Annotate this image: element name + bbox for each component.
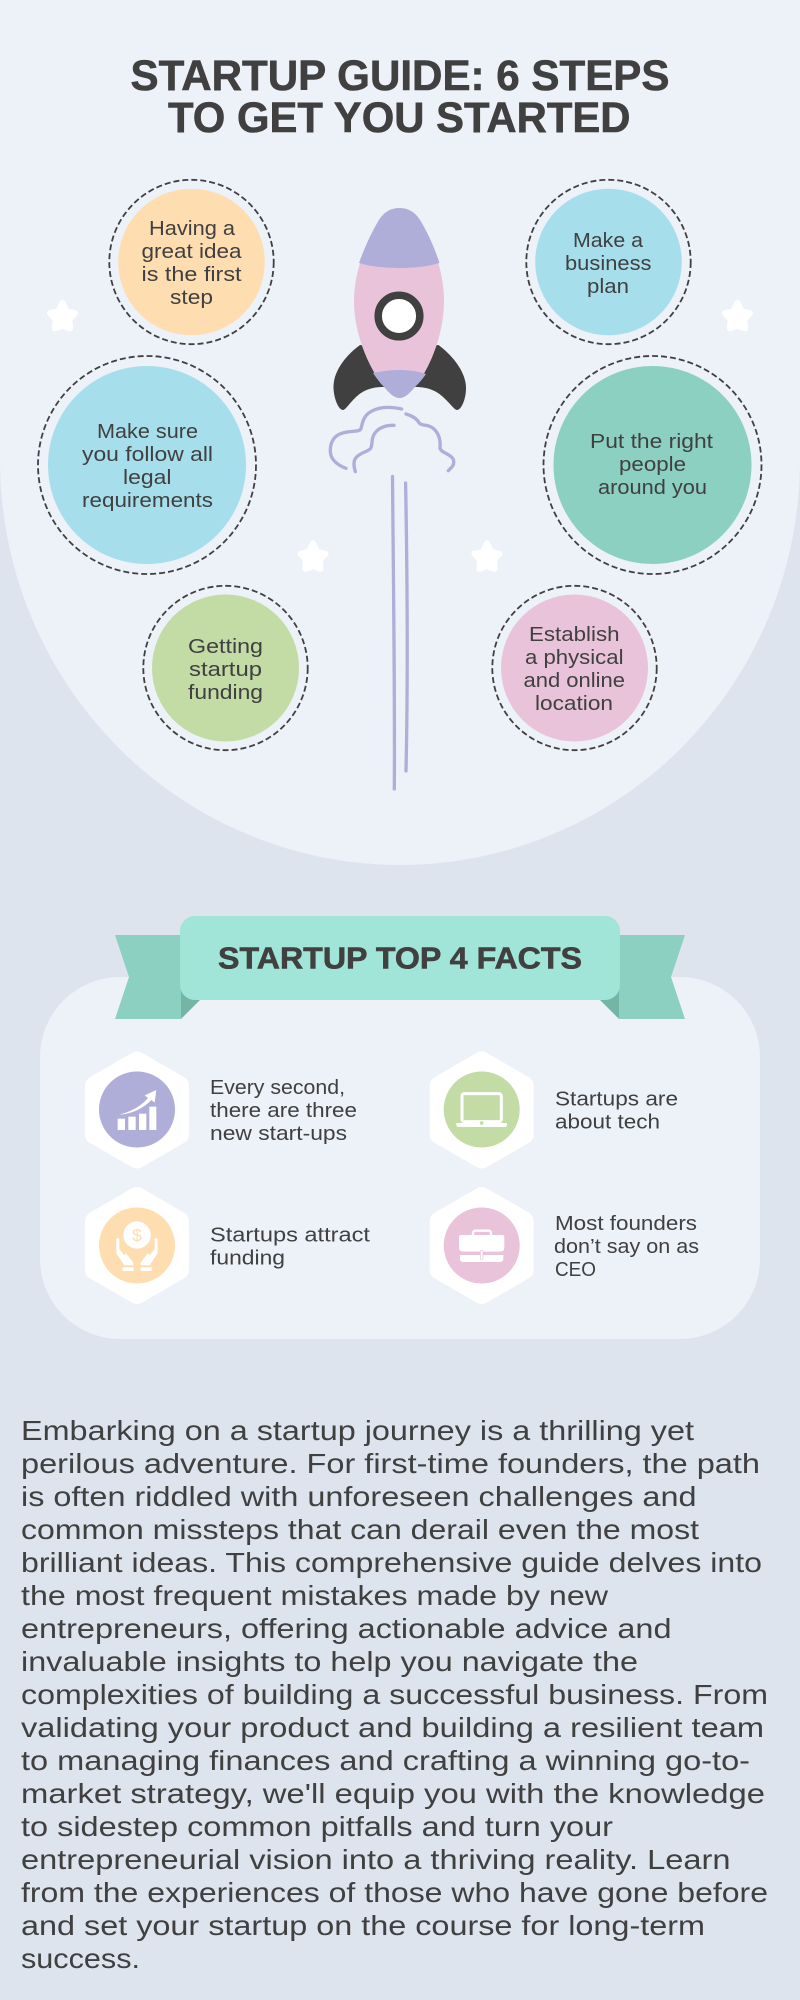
step: follow legal requirements: requirements [82, 489, 213, 512]
step: having a great idea: is the first [142, 263, 242, 286]
text block: intro paragraph: and set your startup on the course for long-term [21, 1910, 705, 1941]
fact: most founders don't stay on as CEO: don’t say on as [554, 1235, 699, 1258]
text block: intro paragraph: is often riddled with unforeseen challenges and [21, 1481, 696, 1512]
text block: intro paragraph: market strategy, we'll equip you with the knowledge [21, 1778, 765, 1809]
fact: every second three new start-ups: Every second, [210, 1076, 345, 1099]
icon: laptop [456, 1094, 507, 1127]
step: put the right people around you [544, 356, 762, 574]
text block: intro paragraph: success. [21, 1943, 140, 1974]
text block: intro paragraph: entrepreneurs, offering actionable advice and [21, 1613, 672, 1644]
title [130, 52, 670, 142]
step: put the right people around you: around you [598, 476, 707, 499]
fact: every second three new start-ups: new start-ups [210, 1122, 347, 1145]
fact: startups attract funding: Startups attract [210, 1224, 370, 1247]
fact: every second three new start-ups [95, 1062, 357, 1158]
step: put the right people around you: Put the right [590, 430, 713, 453]
step: getting startup funding: startup [189, 658, 262, 681]
step: follow legal requirements: Make sure [97, 420, 198, 443]
fact: most founders don't stay on as CEO: Most founders [555, 1212, 697, 1235]
step: getting startup funding: Getting [188, 635, 263, 658]
text block: intro paragraph: common missteps that can derail even the most [21, 1514, 699, 1545]
fact: startups are about tech: Startups are [555, 1088, 678, 1111]
step: getting startup funding [143, 586, 308, 750]
step: establish a physical and online location [492, 586, 657, 750]
fact: startups attract funding [95, 1197, 370, 1294]
banner ribbon with heading: STARTUP TOP 4 FACTS [218, 940, 582, 976]
text block: intro paragraph: entrepreneurial vision into a thriving reality. Learn [21, 1844, 730, 1875]
panel: facts card [40, 977, 760, 1339]
step: establish a physical and online location: Establish [529, 623, 620, 646]
icon: star lower right [474, 544, 500, 569]
icon: rocket [333, 208, 466, 410]
icon: hands holding coin [116, 1221, 158, 1271]
icon: growth chart [118, 1090, 156, 1130]
text block: intro paragraph: to managing finances and crafting a winning go-to- [21, 1745, 750, 1776]
fact: most founders don't stay on as CEO: CEO [555, 1258, 596, 1281]
fact: startups are about tech: about tech [555, 1111, 660, 1134]
step: establish a physical and online location: a physical [525, 646, 624, 669]
step: having a great idea [109, 180, 274, 344]
step: follow legal requirements [38, 356, 256, 574]
text block: intro paragraph: brilliant ideas. This comprehensive guide delves into [21, 1547, 762, 1578]
panel: light top dome background [0, 0, 800, 865]
icon: star upper left [50, 303, 75, 328]
icon: rocket smoke cloud [330, 407, 454, 472]
title: TO GET YOU STARTED [168, 94, 630, 142]
fact: startups attract funding: funding [210, 1246, 285, 1270]
text block: intro paragraph: complexities of building a successful business. From [21, 1679, 768, 1710]
icon: briefcase [459, 1231, 504, 1262]
step: getting startup funding: funding [188, 681, 263, 704]
step: put the right people around you: people [619, 453, 686, 476]
icon: star lower left [300, 544, 326, 569]
icon: rocket exhaust lines [392, 476, 407, 789]
step: having a great idea: step [170, 286, 213, 309]
text block: intro paragraph: invaluable insights to help you navigate the [21, 1646, 638, 1677]
text block: intro paragraph: Embarking on a startup journey is a thrilling yet [21, 1415, 694, 1446]
step: having a great idea: great idea [142, 240, 242, 263]
step: establish a physical and online location: and online [524, 669, 625, 692]
step: make a business plan [526, 180, 691, 344]
title: STARTUP GUIDE: 6 STEPS [130, 52, 670, 100]
fact: startups are about tech [440, 1062, 678, 1158]
fact: most founders don't stay on as CEO [440, 1197, 699, 1294]
text block: intro paragraph: from the experiences of those who have gone before [21, 1877, 768, 1908]
icon: star upper right [725, 303, 750, 328]
step: make a business plan: Make a [573, 229, 644, 252]
text block: intro paragraph: validating your product and building a resilient team [21, 1712, 764, 1743]
step: follow legal requirements: you follow all [82, 443, 213, 466]
step: establish a physical and online location: location [535, 692, 613, 715]
text block: intro paragraph [21, 1415, 768, 1974]
step: make a business plan: business [565, 252, 652, 275]
text block: intro paragraph: the most frequent mistakes made by new [21, 1580, 608, 1611]
text block: intro paragraph: to sidestep common pitfalls and turn your [21, 1811, 613, 1842]
icon: hands holding coin: $ [132, 1226, 142, 1246]
fact: every second three new start-ups: there are three [210, 1099, 357, 1122]
banner ribbon with heading [115, 916, 685, 1019]
step: make a business plan: plan [587, 275, 629, 298]
step: follow legal requirements: legal [123, 466, 172, 489]
text block: intro paragraph: perilous adventure. For first-time founders, the path [21, 1448, 760, 1479]
step: having a great idea: Having a [149, 217, 236, 240]
